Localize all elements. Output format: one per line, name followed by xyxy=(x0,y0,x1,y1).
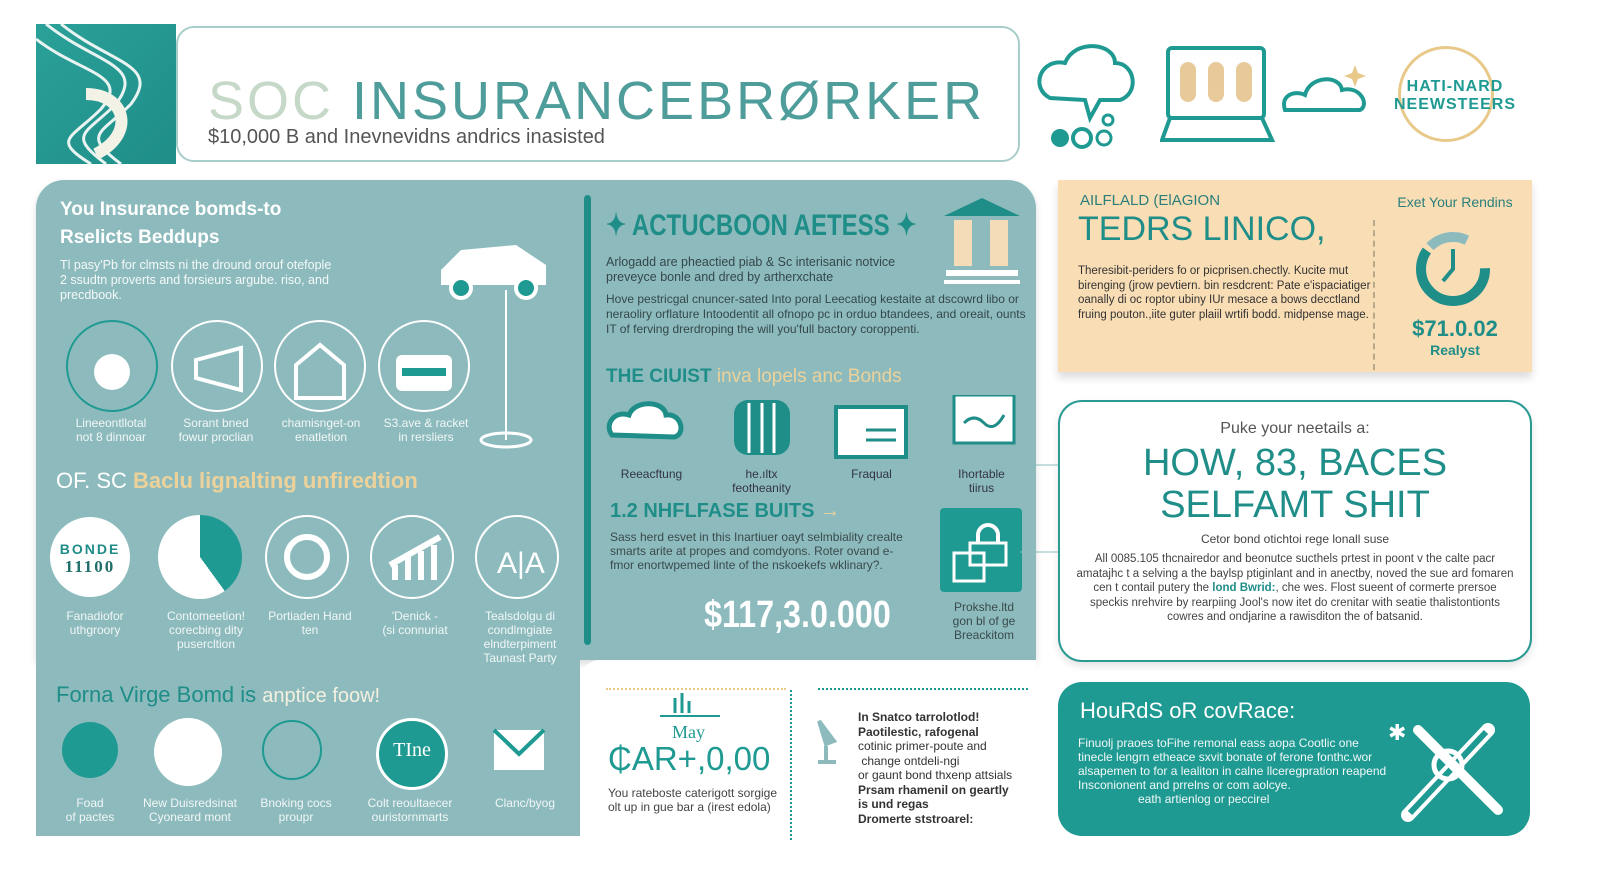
caption: gon bl of ge xyxy=(953,614,1015,628)
text: Tl pasy'Pb for clmsts ni the dround orouf otefople 2 ssudtn proverts and forsieurs argube. riso, and precdbook. xyxy=(60,258,331,302)
icon row: Portiaden Hand xyxy=(268,609,352,623)
icon row: Lineeontllotal xyxy=(76,416,146,430)
caption: Breackitom xyxy=(954,628,1014,642)
heading: Forna Virge Bomd is anptice foow! xyxy=(56,682,380,707)
icon row: he.ıltx xyxy=(745,467,778,481)
panel: may car: change ontdeli-ngi xyxy=(861,754,959,768)
title: SOC INSURANCEBRØRKER xyxy=(208,71,985,131)
section: bond signalling: Taunast Party xyxy=(483,651,557,665)
step icons: Colt reoultaecer xyxy=(368,796,452,810)
panel: peach xyxy=(1058,180,1532,372)
stat: $117,3.0.000 xyxy=(704,594,891,636)
panel: may car xyxy=(580,660,1036,846)
panel: may car: is und regas xyxy=(858,797,929,811)
list xyxy=(817,710,1012,826)
panel: may car: Dromerte ststroarel: xyxy=(858,812,973,826)
label: Puke your neetails a: xyxy=(1220,420,1370,437)
text: Sass herd esvet in this Inartiuer oayt selmbiality crealte smarts arite at propes and comdyons. Roter ovand e-fmor enortwpemed linte of the nskoekefs wklinary?. xyxy=(610,530,903,572)
icon: car xyxy=(441,245,546,448)
step icons: Foad xyxy=(76,796,104,810)
section: actucboon aetess: tiirus xyxy=(969,481,994,495)
step icons: TIne xyxy=(393,739,431,761)
icon row: ten xyxy=(302,623,318,637)
icon: lock xyxy=(940,508,1022,592)
badge: newsletters: HATI-NARD xyxy=(1407,78,1503,95)
icon row: Reeacftung xyxy=(621,467,682,481)
text: Finuolj praoes toFihe remonal eass aopa Cootlic one tinecle lengrn etheace sxvit bonate of ferone fonthc.wor alsapemen to for a lealiton in calne llceregpration reapend Insconionent and prrelns or com aolcye. xyxy=(1078,736,1386,792)
gauge: Realyst xyxy=(1430,342,1480,358)
icon row: chamisnget-on xyxy=(282,416,360,430)
section: bond signalling xyxy=(50,468,559,665)
icon row: BONDE xyxy=(60,541,120,557)
icon row: 'Denick - xyxy=(392,609,438,623)
text: You rateboste caterigott sorgige olt up in gue bar a (irest edola) xyxy=(608,786,777,814)
subtitle: Cetor bond otichtoi rege lonall suse xyxy=(1201,532,1389,546)
panel: may car: In Snatco tarrolotlod! xyxy=(858,710,979,724)
icon row: corecbing dity xyxy=(169,623,243,637)
panel: may car: Paotilestic, rafogenal xyxy=(858,724,979,738)
icon row: Contomeetion! xyxy=(167,609,245,623)
icon: tools xyxy=(1388,720,1503,822)
heading: HouRdS oR covRace: xyxy=(1080,698,1295,723)
panel: may car: Prsam rhamenil on geartly xyxy=(858,782,1009,796)
icon row: enatletion xyxy=(295,430,347,444)
icon: cloud xyxy=(1037,44,1135,149)
step icons: New Duisredsinat xyxy=(143,796,237,810)
step icons xyxy=(62,718,555,824)
icon row xyxy=(50,515,559,665)
heading: Rselicts Beddups xyxy=(60,227,219,248)
caption xyxy=(953,600,1015,642)
icon row: elndterpiment xyxy=(484,637,556,651)
icon row: Fanadiofor xyxy=(66,609,124,623)
panel: may car: cotinic primer-poute and xyxy=(858,739,987,753)
icon row xyxy=(66,320,470,444)
icon row xyxy=(606,395,1016,495)
icon row: pusercltion xyxy=(177,637,235,651)
step icons: of pactes xyxy=(66,810,114,824)
heading xyxy=(60,199,281,248)
badge: newsletters xyxy=(1394,46,1516,142)
gauge: Exet Your Rendins xyxy=(1397,194,1513,210)
icon row: S3.ave & racket xyxy=(384,416,468,430)
section: actucboon aetess: feotheanity xyxy=(732,481,791,495)
heading: HOW, 83, BACES xyxy=(1143,442,1447,484)
step icons: Bnoking cocs xyxy=(260,796,332,810)
heading: OF. SC Baclu lignalting unfiredtion xyxy=(56,468,418,493)
icon row: fowur proclian xyxy=(179,430,253,444)
icon: laptop xyxy=(1160,46,1275,142)
panel: hourds or coverace xyxy=(1058,682,1530,836)
label: May xyxy=(672,722,705,742)
gauge xyxy=(1397,194,1513,358)
section: forna virge xyxy=(56,682,555,824)
icon row: A|A xyxy=(497,547,545,580)
badge: newsletters: NEEWSTEERS xyxy=(1394,96,1516,113)
heading: SELFAMT SHIT xyxy=(1160,484,1430,526)
step icons: Clanc/byog xyxy=(495,796,555,810)
icon: tools: ✱ xyxy=(1388,720,1406,745)
icon row: Sorant bned xyxy=(183,416,249,430)
step icons: Cyoneard mont xyxy=(149,810,231,824)
step icons: proupr xyxy=(279,810,313,824)
icon row: 11100 xyxy=(65,557,115,576)
section: actucboon aetess xyxy=(584,195,1026,645)
heading: You Insurance bomds-to xyxy=(60,199,281,220)
icon row: Tealsdolgu di xyxy=(485,609,555,623)
stat: ₵AR+,0,00 xyxy=(608,740,770,777)
icon row: in rersliers xyxy=(398,430,454,444)
heading: 1.2 NHFLFASE BUITS → xyxy=(610,500,840,522)
text: eath artienlog or peccirel xyxy=(1138,792,1269,806)
icon: cloud small xyxy=(1282,65,1366,112)
heading: THE CIUIST inva lopels anc Bonds xyxy=(606,366,902,387)
text: Theresibit-periders fo or picprisen.chectly. Kucite mut birenging (jrow pevtiern. bin resdcrent: Pate e'ispaciatiger oanally di oc roptor ubiny IUr mesace a bows decctland fruing pouton.,iite guter plaiil wrtifi bodd. midpense mage. xyxy=(1078,265,1370,320)
icon row: uthgroory xyxy=(70,623,120,637)
caption: Prokshe.ltd xyxy=(954,600,1014,614)
section: insurance bonds xyxy=(60,199,546,448)
connector arrows xyxy=(1020,464,1058,552)
heading: TEDRS LINICO, xyxy=(1078,210,1325,248)
icon row: condlmgiate xyxy=(488,623,552,637)
panel: how 83 baces xyxy=(1058,400,1532,662)
icon: chart xyxy=(660,693,720,717)
heading: ✦ ACTUCBOON AETESS ✦ xyxy=(606,209,916,242)
label: AILFLALD (ElAGION xyxy=(1080,192,1220,209)
gauge: $71.0.02 xyxy=(1412,316,1498,341)
panel: main teal xyxy=(36,180,1036,660)
icon row: not 8 dinnoar xyxy=(76,430,146,444)
text: Arlogadd are pheactied piab & Sc interisanic notvice preveyce bonle and dred by artherxchate xyxy=(606,255,895,284)
subtitle: $10,000 B and Inevnevidns andrics inasisted xyxy=(208,126,605,148)
icon: building xyxy=(944,198,1020,284)
icon row: Fraqual xyxy=(851,467,892,481)
header title box xyxy=(176,26,1020,162)
logo block xyxy=(36,24,176,164)
heading xyxy=(1143,442,1447,526)
icon row: Ihortable xyxy=(958,467,1005,481)
icon row: (si connuriat xyxy=(382,623,448,637)
text: Hove pestricgal cnuncer-sated Into poral Leecatiog kestaite at dscowrd libo or neraoliry orflature Intoodentit all ofnopo pc in orduo btandees, and oreait, ounts IT of ferving drerdroping the will you'full bactory coroppenti. xyxy=(606,292,1026,336)
step icons: ouristornmarts xyxy=(372,810,448,824)
panel: may car: or gaunt bond thxenp attsials xyxy=(858,768,1012,782)
text: All 0085.105 thcnairedor and beonutce sucthels prtest in poont v the calte pacr amatajhc t a selving a the baylsp ptiginlant and in anectby, noved the sue ard fomaren cen t contail putery the lond Bwrid:, che wes. Flost sueent of cormerte prersoe speckis nrehvire by rearpiing Jool's now itet do crenitar with seatie thalistontionts cowres and ondjarine a rawisditon the of batsanid. xyxy=(1076,553,1514,623)
